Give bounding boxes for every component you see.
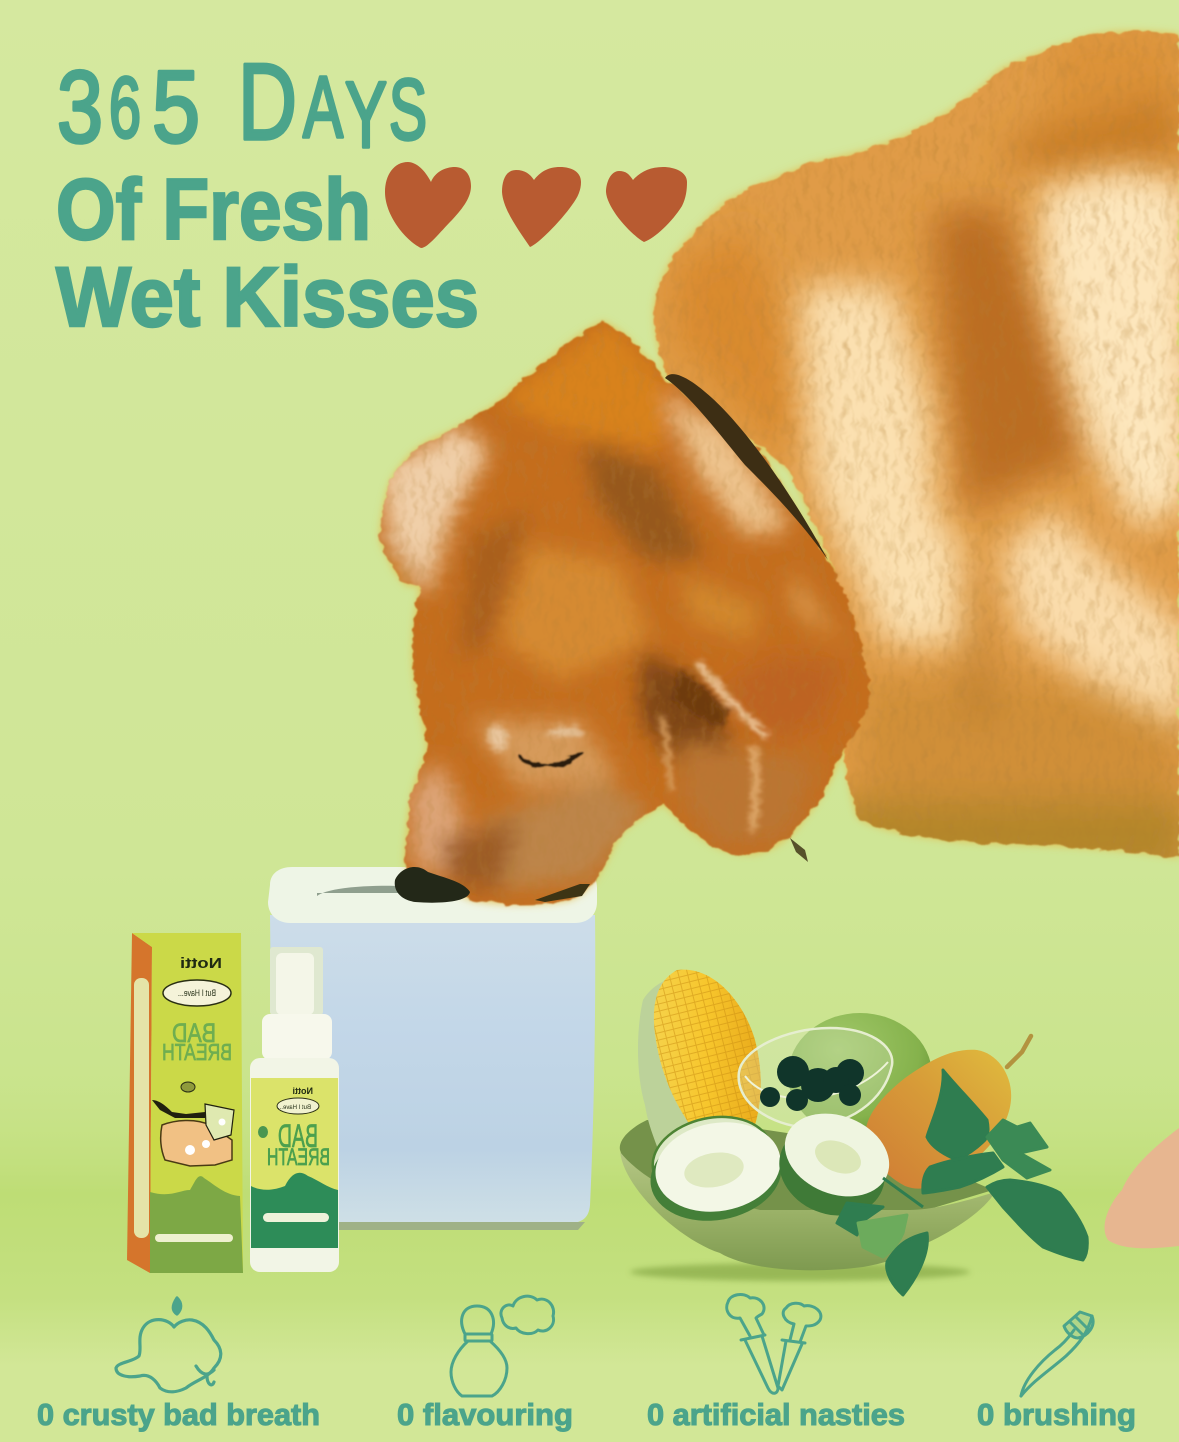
apple [788, 1013, 932, 1137]
bottle pill: But I Have... [278, 1105, 311, 1111]
product box [127, 933, 243, 1273]
title line 3: Wet Kisses [56, 250, 479, 344]
bottle label [251, 1078, 338, 1248]
dog nose [395, 867, 590, 903]
spray bottle [250, 947, 339, 1272]
ear tip [790, 838, 808, 862]
title line 1: D [238, 41, 297, 163]
bowl inside [620, 1120, 993, 1215]
icon: large heart [385, 162, 471, 248]
collar [262, 1014, 332, 1060]
box front [132, 933, 243, 1273]
box lower hill [150, 1176, 243, 1273]
cucumber right [765, 1099, 902, 1231]
dog [370, 0, 1179, 920]
floor [0, 1060, 1179, 1442]
box pill: But I Have... [178, 988, 216, 998]
label: crusty bad breath: 0 crusty bad breath [37, 1397, 320, 1432]
corn husk [638, 975, 757, 1155]
pump [270, 947, 323, 1015]
box title: BREATH [162, 1039, 232, 1065]
title line 1: 6 [109, 60, 141, 156]
icon: right heart [606, 167, 687, 242]
title line 1: Y [345, 62, 387, 167]
box title: BAD [172, 1018, 216, 1048]
bottle title: BAD [278, 1118, 318, 1154]
bottle title [267, 1118, 330, 1171]
box pill [163, 980, 231, 1006]
mint leaves [837, 1070, 1087, 1295]
label: flavouring: 0 flavouring [397, 1397, 573, 1432]
paw [1105, 1128, 1179, 1248]
bowl shadow [630, 1263, 970, 1281]
box brand: Notti [180, 955, 222, 972]
corn cob [654, 970, 761, 1125]
dog head [370, 300, 880, 920]
icon: test tubes [727, 1295, 821, 1393]
box side [127, 933, 152, 1273]
bottle turtle icon [258, 1126, 268, 1138]
icon: bad breath blob [116, 1298, 221, 1392]
title line 1 [57, 41, 427, 167]
bottle pill [277, 1098, 319, 1114]
label: artificial nasties: 0 artificial nasties [647, 1397, 905, 1432]
bottle brand: Notti [292, 1086, 313, 1096]
box dog and cat illustration [152, 1100, 234, 1166]
title [56, 41, 479, 344]
eye [520, 753, 580, 766]
bottle lower hill [251, 1173, 338, 1248]
fountain lid [268, 867, 597, 923]
box bee [181, 1082, 195, 1092]
label: brushing: 0 brushing [977, 1397, 1136, 1432]
bottle body [250, 1058, 339, 1272]
title line 2: Of Fresh [56, 162, 371, 258]
title line 1: S [389, 62, 427, 158]
icon: middle heart [502, 167, 581, 247]
title line 1: 5 [152, 50, 200, 164]
collar [665, 374, 828, 560]
dog body [640, 0, 1179, 880]
icon: toothbrush [1021, 1312, 1093, 1396]
bottle title: BREATH [267, 1144, 330, 1171]
fountain body [270, 915, 595, 1227]
fountain [268, 867, 597, 1230]
fur halo [380, 31, 1179, 905]
title line 1: A [303, 59, 343, 156]
box title [162, 1018, 232, 1065]
fruit bowl [620, 970, 1087, 1295]
glass dish [739, 1028, 892, 1127]
title line 1: 3 [57, 50, 103, 164]
cucumber left [643, 1106, 789, 1231]
icon: perfume bottle [451, 1296, 554, 1396]
pear [865, 1036, 1031, 1189]
blueberries [760, 1056, 864, 1111]
bowl front [620, 1152, 995, 1270]
